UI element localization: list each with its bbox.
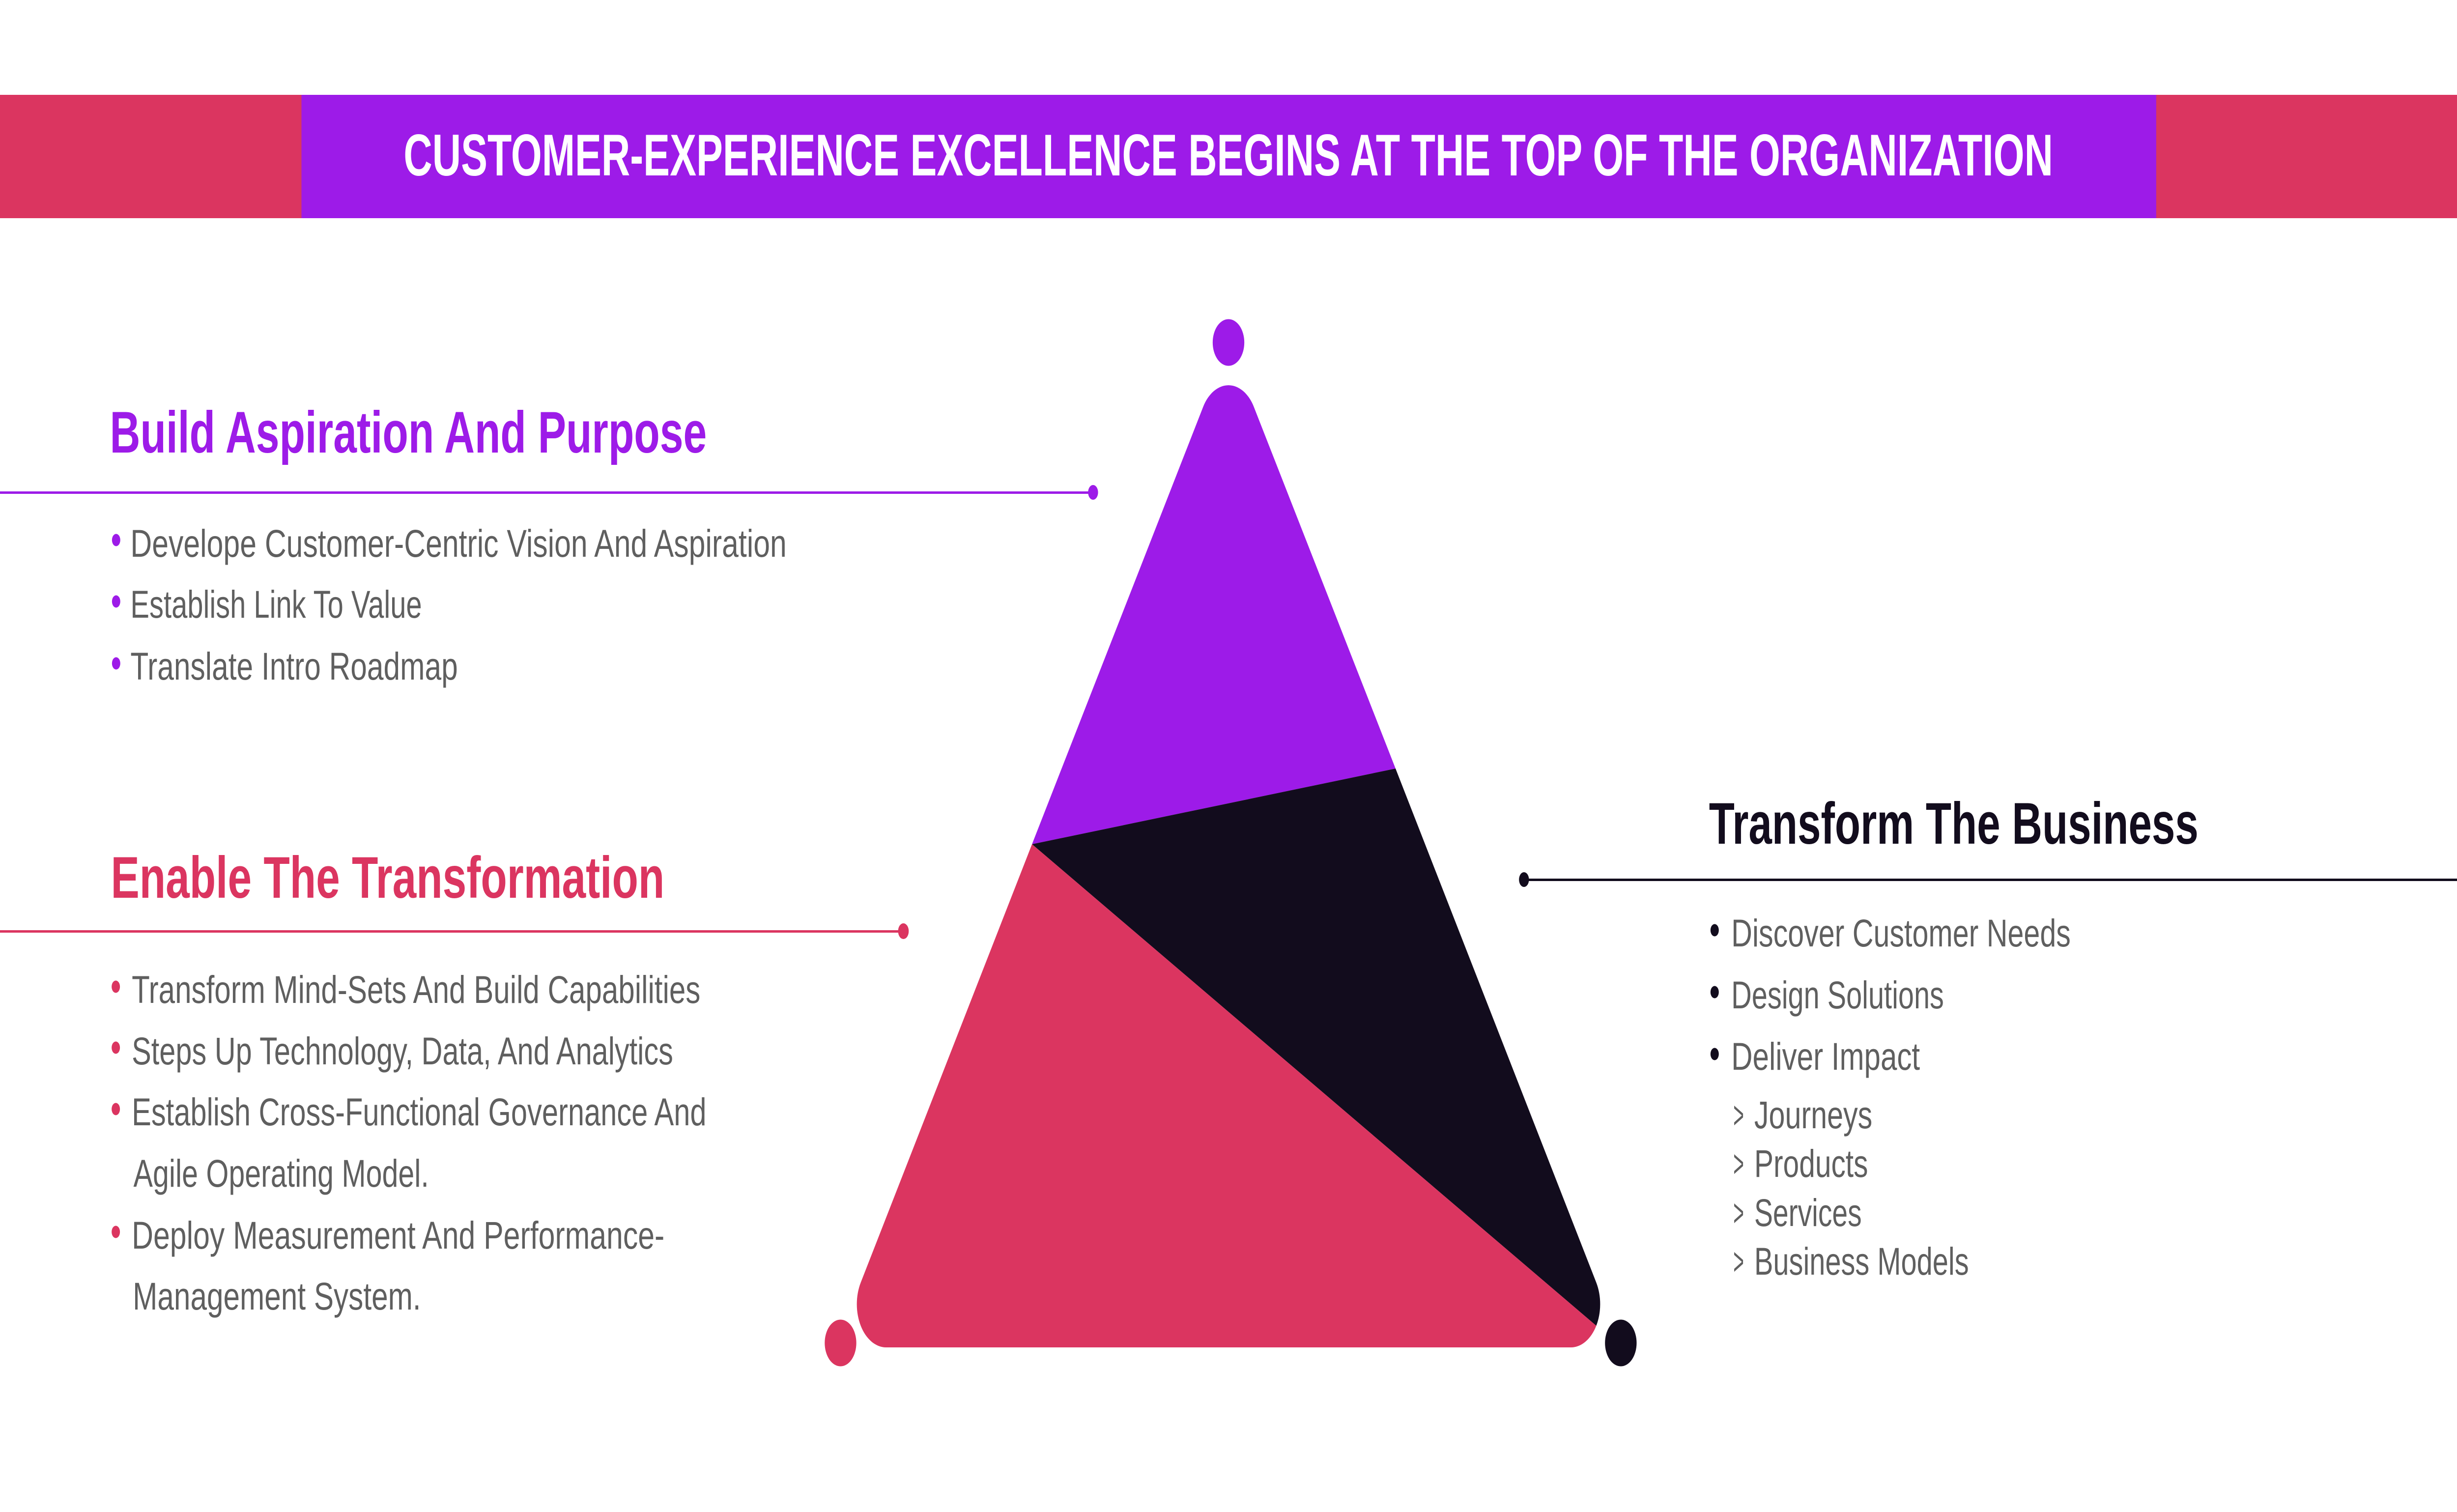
title: CUSTOMER-EXPERIENCE EXCELLENCE BEGINS AT THE TOP OF THE ORGANIZATION	[403, 122, 2053, 188]
bullet list: red: Agile Operating Model.	[134, 1152, 429, 1196]
sub list: deliver impact items: >	[1733, 1094, 1744, 1137]
sub list: deliver impact items: >	[1733, 1240, 1744, 1284]
bullet list: purple	[112, 522, 787, 688]
sub list: deliver impact items: Products	[1754, 1142, 1868, 1186]
heading: enable the transformation: Enable The Transformation	[111, 844, 664, 911]
bullet list: dark	[1711, 912, 2071, 1079]
connector line: red	[0, 923, 909, 939]
bullet list: red: Establish Cross-Functional Governance And	[132, 1091, 707, 1134]
bullet list: purple: Establish Link To Value	[130, 583, 422, 627]
sub list: deliver impact items: Journeys	[1754, 1094, 1872, 1137]
bullet list: dark: Design Solutions	[1731, 974, 1944, 1017]
bullet list: red: Management System.	[133, 1275, 421, 1318]
sub list: deliver impact items: >	[1733, 1142, 1744, 1186]
bullet list: red	[112, 969, 707, 1318]
sub list: deliver impact items: Business Models	[1754, 1240, 1969, 1284]
vertex dot: top purple	[1213, 319, 1244, 366]
bullet list: red: Deploy Measurement And Performance-	[132, 1214, 664, 1257]
bullet list: dark: Deliver Impact	[1731, 1035, 1920, 1079]
panel: transform the business	[1519, 790, 2457, 1284]
sub list: deliver impact items: Services	[1754, 1192, 1862, 1235]
bullet list: red: Transform Mind-Sets And Build Capabilities	[132, 969, 700, 1012]
pyramid triangle	[857, 385, 1600, 1347]
connector line: dark	[1519, 872, 2457, 887]
title banner	[0, 95, 2457, 218]
bullet list: dark: Discover Customer Needs	[1731, 912, 2071, 955]
segment: right dark	[1032, 769, 1600, 1326]
panel: enable the transformation	[0, 844, 909, 1318]
segment: bottom red	[857, 844, 1596, 1347]
bullet list: purple: Develope Customer-Centric Vision And Aspiration	[130, 522, 787, 566]
vertex dot: left red	[825, 1320, 857, 1366]
bullet list: red: Steps Up Technology, Data, And Analytics	[132, 1030, 673, 1073]
heading: transform the business: Transform The Business	[1709, 790, 2199, 856]
panel: build aspiration and purpose	[0, 399, 1098, 688]
sub list: deliver impact items: >	[1733, 1192, 1744, 1235]
sub list: deliver impact items	[1733, 1094, 1969, 1284]
connector line: purple	[0, 485, 1098, 500]
vertex dot: right dark	[1605, 1320, 1637, 1366]
heading: build aspiration and purpose: Build Aspiration And Purpose	[110, 399, 707, 465]
segment: top purple	[1032, 385, 1396, 844]
bullet list: purple: Translate Intro Roadmap	[130, 645, 458, 688]
